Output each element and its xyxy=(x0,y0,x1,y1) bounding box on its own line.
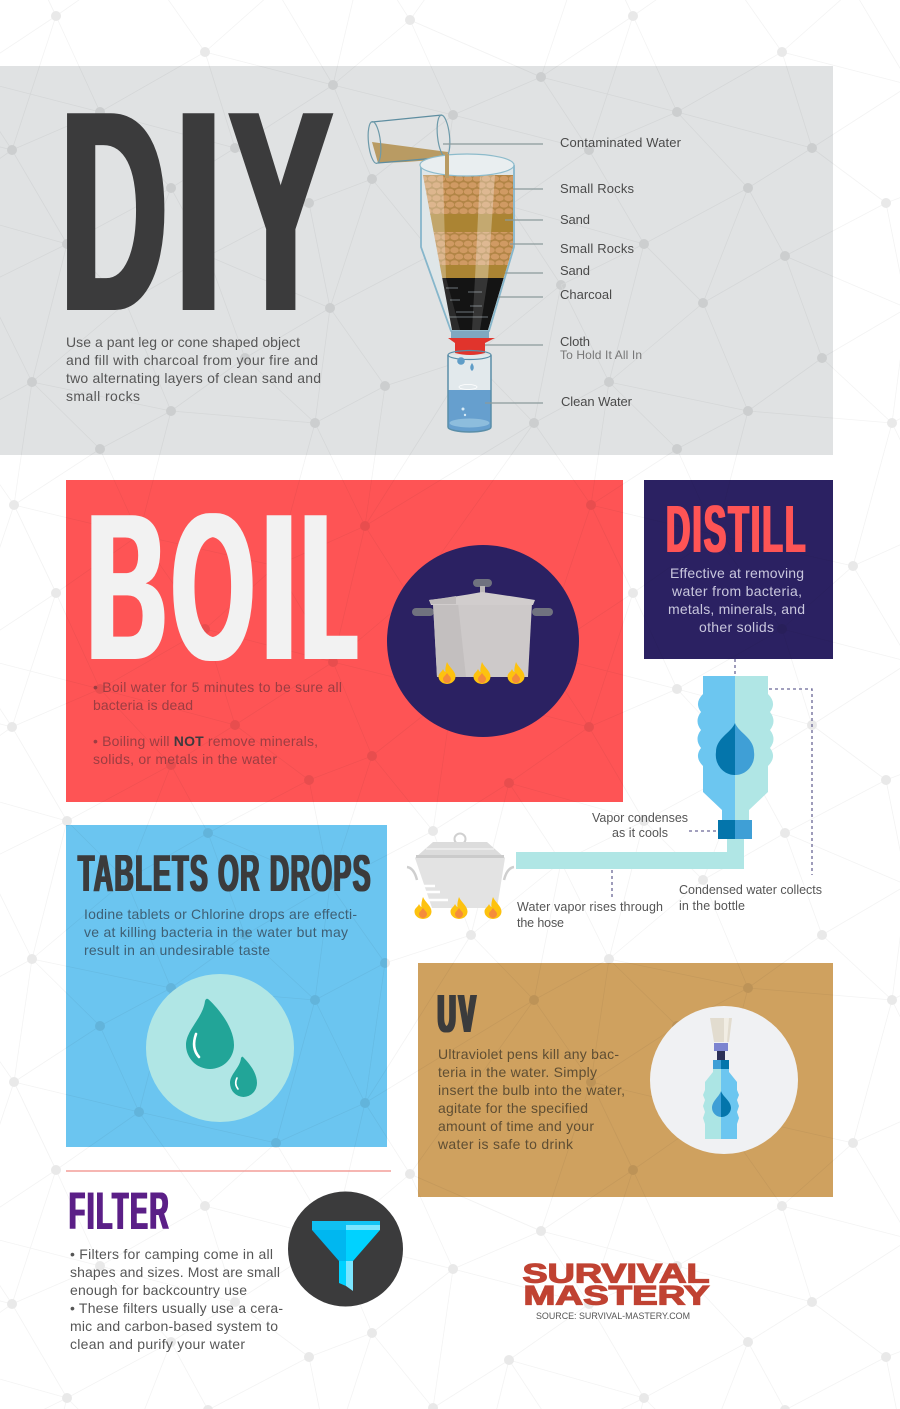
icon: bottle filter xyxy=(420,154,515,338)
text block: UV description: agitate for the specified xyxy=(438,1100,588,1116)
annotation: vapor through hose: the hose xyxy=(517,916,564,930)
text block: UV description: teria in the water. Simply xyxy=(438,1064,597,1080)
logo: Survival Mastery: MASTERY xyxy=(524,1280,710,1310)
text block: distill description: other solids xyxy=(699,619,774,635)
text block: UV description: Ultraviolet pens kill any bac- xyxy=(438,1046,619,1062)
diagram labels and leader lines: Charcoal xyxy=(560,287,612,302)
diagram labels and leader lines: To Hold It All In xyxy=(560,348,642,362)
text block: DIY instructions: small rocks xyxy=(66,388,140,404)
icon: vapor hose xyxy=(516,839,744,869)
icon: UV pen in bottle xyxy=(650,1006,798,1154)
text block: distill description xyxy=(668,565,805,635)
title: BOIL xyxy=(87,471,355,704)
diagram labels and leader lines: Small Rocks xyxy=(560,181,634,196)
annotation: condensed water xyxy=(679,883,822,913)
annotation: vapor condenses: as it cools xyxy=(612,826,668,840)
text block: boil notes: • Boil water for 5 minutes to be sure all xyxy=(93,679,342,695)
diagram labels and leader lines xyxy=(443,135,682,409)
diagram labels and leader lines: Small Rocks xyxy=(560,241,634,256)
logo: Survival Mastery: SURVIVAL xyxy=(522,1258,710,1288)
panel: FILTER: FILTER xyxy=(69,1182,170,1241)
annotation: vapor condenses xyxy=(592,811,688,840)
text block: UV description: amount of time and your xyxy=(438,1118,594,1134)
icon: pot on flames xyxy=(387,545,579,737)
diagram labels and leader lines: Sand xyxy=(560,212,590,227)
panel: BOIL xyxy=(66,480,623,802)
icon: collection bottle xyxy=(698,676,774,839)
icon: collection jar xyxy=(448,350,491,432)
text block: DIY instructions: and fill with charcoal from your fire and xyxy=(66,352,318,368)
text block: distill description: water from bacteria, xyxy=(671,583,802,599)
text block: boil notes: solids, or metals in the water xyxy=(93,751,277,767)
panel: distillation diagram xyxy=(406,659,822,930)
panel: DISTILL xyxy=(644,480,833,659)
text block: tablets description: ve at killing bacteria in the water but may xyxy=(84,924,348,940)
text block: filter notes: clean and purify your water xyxy=(70,1336,245,1352)
text block: distill description: metals, minerals, and xyxy=(668,601,805,617)
text block: filter notes xyxy=(70,1246,283,1352)
text block: filter notes: • Filters for camping come in all xyxy=(70,1246,273,1262)
text block: boil notes: • Boiling will NOT remove minerals, xyxy=(93,733,318,749)
logo: Survival Mastery: SOURCE: SURVIVAL-MASTERY.COM xyxy=(536,1311,690,1322)
panel: FILTER xyxy=(66,1170,403,1352)
diagram labels and leader lines: Cloth xyxy=(560,334,590,349)
logo: Survival Mastery xyxy=(522,1258,710,1322)
text block: boil notes: bacteria is dead xyxy=(93,697,193,713)
annotation: vapor condenses: Vapor condenses xyxy=(592,811,688,825)
text block: filter notes: • These filters usually use a cera- xyxy=(70,1300,283,1316)
text block: DIY instructions xyxy=(66,334,321,404)
divider line xyxy=(66,1170,391,1172)
icon: cloth and cap xyxy=(448,338,495,355)
icon: water drops xyxy=(146,974,294,1122)
text block: tablets description xyxy=(84,906,357,958)
dashed connectors xyxy=(612,659,812,897)
text block: filter notes: shapes and sizes. Most are small xyxy=(70,1264,280,1280)
icon: grey pot with flames xyxy=(407,834,514,919)
icon: pouring glass xyxy=(366,114,452,164)
text block: distill description: Effective at removing xyxy=(670,565,804,581)
text block: UV description: insert the bulb into the water, xyxy=(438,1082,625,1098)
text block: UV description xyxy=(437,1046,625,1152)
panel: TABLETS OR DROPS xyxy=(66,825,387,1147)
icon: funnel xyxy=(288,1192,403,1306)
panel: DIY xyxy=(0,66,833,455)
annotation: condensed water: in the bottle xyxy=(679,899,745,913)
text block: boil notes xyxy=(93,679,342,767)
annotation: vapor through hose xyxy=(517,900,663,930)
text block: tablets description: result in an undesirable taste xyxy=(84,942,270,958)
diagram labels and leader lines: Clean Water xyxy=(561,394,633,409)
annotation: vapor through hose: Water vapor rises through xyxy=(517,900,663,914)
diagram labels and leader lines: Contaminated Water xyxy=(560,135,682,150)
panel: UV xyxy=(418,963,833,1197)
text block: DIY instructions: two alternating layers of clean sand and xyxy=(66,370,321,386)
diagram labels and leader lines: Sand xyxy=(560,263,590,278)
annotation: condensed water: Condensed water collects xyxy=(679,883,822,897)
text block: filter notes: enough for backcountry use xyxy=(70,1282,247,1298)
text block: tablets description: Iodine tablets or Chlorine drops are effecti- xyxy=(84,906,357,922)
text block: filter notes: mic and carbon-based system to xyxy=(70,1318,278,1334)
panel: UV: UV xyxy=(438,984,478,1044)
text block: UV description: water is safe to drink xyxy=(437,1136,574,1152)
text block: DIY instructions: Use a pant leg or cone shaped object xyxy=(66,334,300,350)
